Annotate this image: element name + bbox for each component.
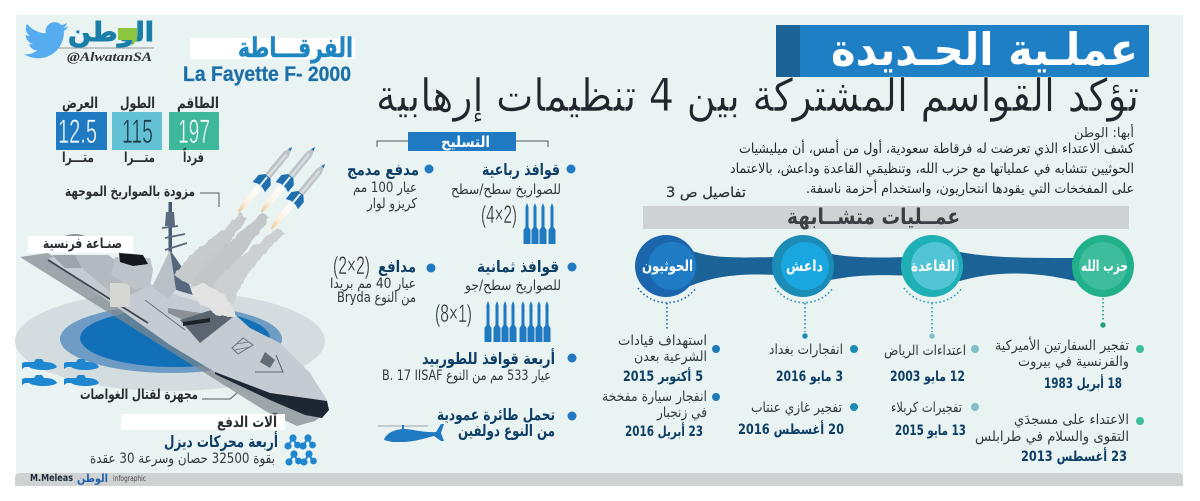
- armament: quad launchers: قوافذ رباعية: [482, 160, 560, 179]
- timeline connectors: [666, 250, 1103, 286]
- armament: quad launchers: للصواريخ سطح/سطح: [451, 182, 561, 198]
- Hezbollah events: [975, 336, 1144, 465]
- ISIS events: تفجير غازي عنتاب: [751, 400, 842, 416]
- smoke trails: [174, 212, 284, 318]
- armament: helicopter: [378, 405, 576, 442]
- node: Al-Qaeda: [901, 235, 963, 339]
- node: ISIS: [772, 235, 834, 339]
- armament: octuple launchers: [435, 257, 576, 342]
- armament: torpedo launchers: أربعة قوافذ للطوربيد: [422, 348, 555, 368]
- Hezbollah events: الاعتداء على مسجدَي: [1014, 412, 1129, 428]
- Houthi events: 23 أبريل 2016: [625, 422, 703, 440]
- propulsion block: آلات الدفع: [217, 413, 278, 431]
- armament: compact gun: كريزو لوار: [366, 196, 417, 212]
- armament: helicopter: من النوع دولفين: [458, 421, 555, 440]
- logo: Twitter bird and Alwatan: الوطن: [68, 18, 154, 48]
- article text: الحوثيين تتشابه في عملياتها مع حزب الله، وتنظيمَي القاعدة وداعش، بالاعتماد: [730, 161, 1134, 177]
- armament: octuple launchers: للصواريخ سطح/جو: [464, 278, 561, 294]
- page reference: تفاصيل ص 3: [666, 185, 746, 201]
- armament header: [377, 132, 548, 151]
- frigate heading: La Fayette F- 2000: [183, 63, 351, 86]
- node: Al-Qaeda: القاعدة: [911, 257, 955, 275]
- article text: على المفخخات التي يقودها انتحاريون، واستخدام أحزمة ناسفة.: [806, 179, 1134, 197]
- stat: length: [112, 94, 162, 166]
- callout: guided missiles: مزودة بالصواريخ الموجهة: [65, 184, 195, 200]
- stat: crew: [169, 94, 219, 166]
- ISIS events: انفجارات بغداد: [769, 342, 843, 358]
- Al-Qaeda events: 13 مايو 2015: [895, 423, 966, 439]
- frigate heading: [183, 33, 355, 86]
- armament: cannons: من النوع Bryda: [337, 290, 416, 306]
- propulsion block: بقوة 32500 حصان وسرعة 30 عقدة: [90, 451, 275, 467]
- Houthi events: انفجار سيارة مفخخة: [602, 389, 707, 405]
- footer bar: infographic: [113, 474, 146, 483]
- logo: Twitter bird and Alwatan: [24, 18, 154, 64]
- article text: [730, 124, 1135, 197]
- Hezbollah events: تفجير السفارتين الأميركية: [995, 336, 1129, 354]
- armament: octuple launchers: (8×1): [435, 300, 472, 328]
- callout: anti-submarine: مجهزة لقتال الغواصات: [80, 387, 198, 403]
- footer bar: الوطن: [77, 472, 108, 485]
- ISIS events: 3 مايو 2016: [776, 369, 843, 385]
- armament: quad launchers: [451, 160, 576, 244]
- Al-Qaeda events: 12 مايو 2003: [890, 369, 965, 385]
- armament: cannons: (2×2): [333, 252, 370, 280]
- armament: quad launchers: (4×2): [481, 201, 517, 229]
- Houthi events: الشرعية بعدن: [634, 349, 707, 365]
- Houthi events: [602, 333, 720, 440]
- stat: crew: الطاقم: [177, 94, 219, 112]
- rockets: [232, 142, 331, 234]
- section header: similar operations: [643, 205, 1129, 230]
- armament: compact gun: [347, 160, 434, 212]
- node: Hezbollah: [1072, 235, 1134, 328]
- Houthi events: استهداف قيادات: [618, 333, 707, 349]
- Hezbollah events: 18 أبريل 1983: [1044, 374, 1122, 392]
- footer bar: M.Meleas: [30, 473, 73, 484]
- Al-Qaeda events: اعتداءات الرياض: [884, 343, 966, 359]
- armament: helicopter: تحمل طائرة عمودية: [437, 405, 555, 424]
- stat: width: متـــرا: [62, 150, 94, 166]
- armament: compact gun: مدفع مدمج: [347, 160, 419, 179]
- label: French made: صنـاعة فرنسية: [43, 236, 122, 252]
- Hezbollah events: والفرنسية في بيروت: [1018, 354, 1129, 370]
- armament header: التسليح: [441, 133, 490, 151]
- node: ISIS: داعش: [786, 257, 823, 275]
- armament: torpedo launchers: عيار 533 مم من النوع B. 17 IISAF: [382, 368, 551, 384]
- stat: width: 12.5: [58, 113, 97, 151]
- section header: similar operations: عمــليات متشــابهة: [787, 205, 960, 230]
- article text: أبها: الوطن: [1074, 124, 1134, 141]
- callout: guided missiles: [65, 184, 219, 207]
- Al-Qaeda events: تفجيرات كربلاء: [891, 400, 962, 416]
- ISIS events: 20 أغسطس 2016: [738, 420, 844, 438]
- submarines: [22, 359, 99, 386]
- propulsion block: [90, 413, 317, 467]
- stat: width: [56, 94, 107, 166]
- propulsion block: أربعة محركات ديزل: [164, 431, 278, 451]
- sonar ellipses: [15, 291, 325, 391]
- title banner: عملـية الحـديدة: [831, 23, 1138, 76]
- armament: cannons: عيار 40 مم بريدا: [330, 276, 416, 292]
- stat: crew: فرداً: [183, 147, 204, 166]
- stat: length: الطول: [120, 94, 155, 112]
- frigate heading: الفرقـــاطة: [238, 33, 353, 64]
- frigate ship: [20, 202, 329, 426]
- article text: كشف الاعتداء الذي تعرضت له فرقاطة سعودية، أول من أمس، أن ميليشيات: [739, 139, 1135, 157]
- stat: width: العرض: [62, 94, 98, 112]
- Houthi events: 5 أكتوبر 2015: [623, 367, 703, 385]
- stat: length: 115: [122, 113, 153, 151]
- stat: length: متـــرا: [124, 150, 155, 166]
- armament: octuple launchers: قوافذ ثمانية: [477, 257, 559, 276]
- ISIS events: [738, 342, 858, 438]
- Hezbollah events: 23 أغسطس 2013: [1021, 447, 1127, 465]
- node: Hezbollah: حزب الله: [1081, 257, 1128, 275]
- footer bar: [15, 472, 1183, 486]
- node: Houthis: الحوثيون: [642, 257, 693, 275]
- Al-Qaeda events: [884, 343, 979, 439]
- armament: compact gun: عيار 100 مم: [353, 180, 417, 196]
- subtitle: تؤكد القواسم المشتركة بين 4 تنظيمات إرهابية: [376, 69, 1139, 122]
- node: Houthis: [635, 235, 697, 331]
- stat: crew: 197: [178, 113, 210, 151]
- armament: cannons: [330, 252, 436, 306]
- logo: Twitter bird and Alwatan: @AlwatanSA: [67, 49, 152, 64]
- armament: torpedo launchers: [382, 348, 576, 384]
- Houthi events: في زنجبار: [656, 405, 707, 421]
- Hezbollah events: التقوى والسلام في طرابلس: [975, 429, 1129, 445]
- armament: cannons: مدافع: [378, 257, 416, 276]
